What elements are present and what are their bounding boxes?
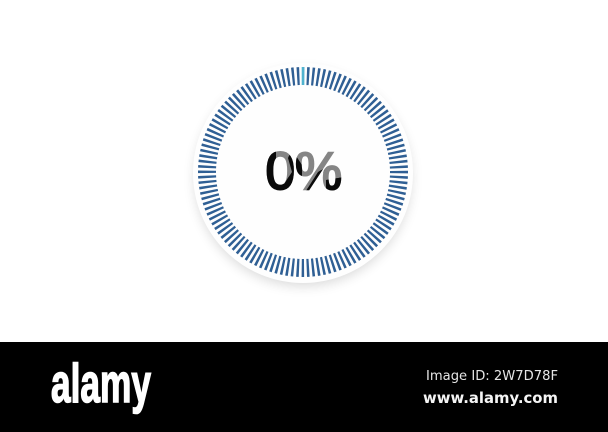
percentage label: 0% xyxy=(266,142,342,201)
tick ring xyxy=(207,76,399,268)
dial drop shadow xyxy=(195,70,411,286)
image id: Image ID: 2W7D78F xyxy=(426,368,558,384)
website url: www.alamy.com xyxy=(423,389,558,407)
footer band xyxy=(0,342,608,432)
percentage label: 0% xyxy=(266,142,342,201)
dial disc xyxy=(193,63,413,283)
active cyan tick xyxy=(302,67,304,85)
percentage label xyxy=(266,151,342,190)
watermark logo: alamy xyxy=(51,352,151,414)
progress dial xyxy=(193,63,413,286)
